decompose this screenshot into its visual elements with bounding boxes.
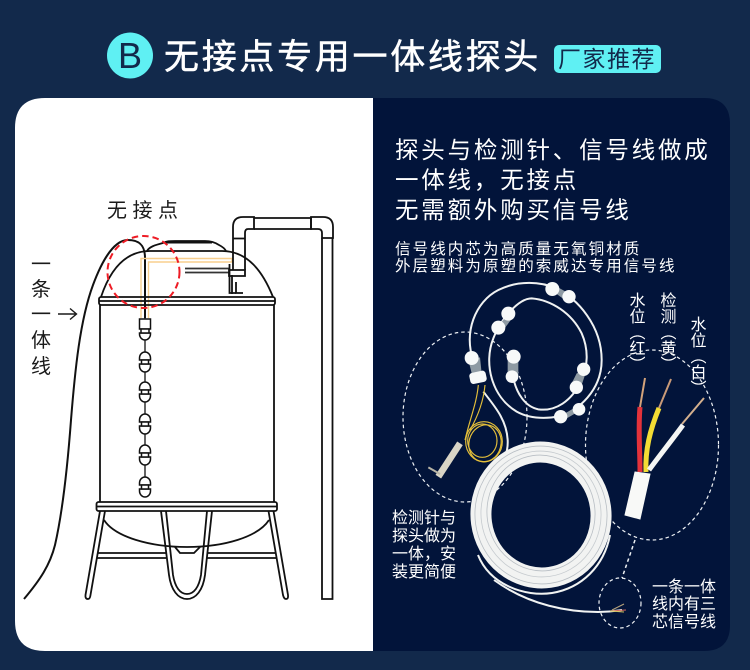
needle probe	[428, 443, 460, 477]
tank body	[100, 305, 274, 502]
tag: factory recommended: 厂家推荐	[558, 46, 656, 72]
U support	[161, 511, 212, 599]
title: 无接点专用一体线探头	[164, 38, 541, 77]
tank dome	[101, 251, 273, 297]
float unit 3	[140, 414, 150, 434]
note: three core cable: 芯信号线	[652, 613, 716, 631]
probe sensors	[465, 282, 590, 423]
note: three core cable	[652, 578, 716, 631]
cable sheath	[625, 472, 650, 519]
wire coil	[466, 437, 622, 612]
description: 外层塑料为原塑的索威达专用信号线	[395, 257, 677, 275]
note: three core cable: 线内有三	[652, 595, 716, 613]
left leg	[85, 511, 105, 599]
note: probe integrated: 装更简便	[392, 563, 456, 581]
wire core labels: 检测（黄）	[658, 292, 676, 372]
heading: 无需额外购买信号线	[395, 197, 632, 223]
label: one integrated cable	[31, 254, 51, 378]
heading: 一体线，无接点	[395, 167, 579, 193]
float chain	[140, 305, 150, 497]
wire core labels: 水位（红）	[626, 292, 646, 372]
red dashed circle	[108, 236, 180, 308]
note: probe integrated: 探头做为	[392, 527, 456, 545]
tank lid	[147, 241, 226, 251]
float unit 1	[140, 352, 150, 372]
inlet valve	[185, 268, 229, 272]
panel: tank diagram	[15, 98, 373, 651]
label: one integrated cable: 线	[31, 355, 51, 378]
wire core labels	[626, 292, 706, 396]
label: one integrated cable: 一	[31, 254, 51, 276]
arrow	[58, 308, 76, 320]
orange internal tube	[141, 258, 232, 318]
panel: probe photo	[373, 98, 730, 651]
float sensor string	[428, 282, 602, 477]
note: probe integrated: 检测针与	[392, 509, 456, 527]
integrated cable	[24, 240, 145, 599]
wire core labels: 水位（白）	[688, 316, 706, 396]
top float	[140, 319, 150, 340]
badge B	[107, 32, 153, 78]
tank base bowl	[104, 520, 269, 547]
badge B: B	[118, 35, 142, 76]
label: one integrated cable: 条	[31, 278, 51, 301]
heading	[395, 137, 711, 223]
right leg	[268, 511, 288, 599]
label: one integrated cable: 一	[31, 304, 51, 326]
inlet pipe	[233, 217, 254, 270]
float unit 5	[140, 477, 150, 497]
small wire ends	[610, 604, 626, 612]
crossbar	[97, 553, 276, 558]
label: one integrated cable: 体	[31, 329, 51, 352]
three core cable	[625, 378, 704, 519]
tank flange	[99, 297, 275, 305]
float unit 2	[140, 382, 150, 402]
note: probe integrated	[392, 509, 456, 581]
header	[107, 32, 661, 78]
note: three core cable: 一条一体	[652, 578, 716, 596]
note: probe integrated: 一体，安	[392, 545, 456, 563]
description	[395, 240, 677, 275]
dashed callouts	[403, 332, 718, 628]
float unit 4	[140, 445, 150, 465]
description: 信号线内芯为高质量无氧铜材质	[395, 240, 641, 258]
label: no contact: 无接点	[107, 199, 184, 222]
lower band	[96, 502, 277, 511]
water tank	[85, 217, 333, 599]
heading: 探头与检测针、信号线做成	[395, 137, 711, 163]
